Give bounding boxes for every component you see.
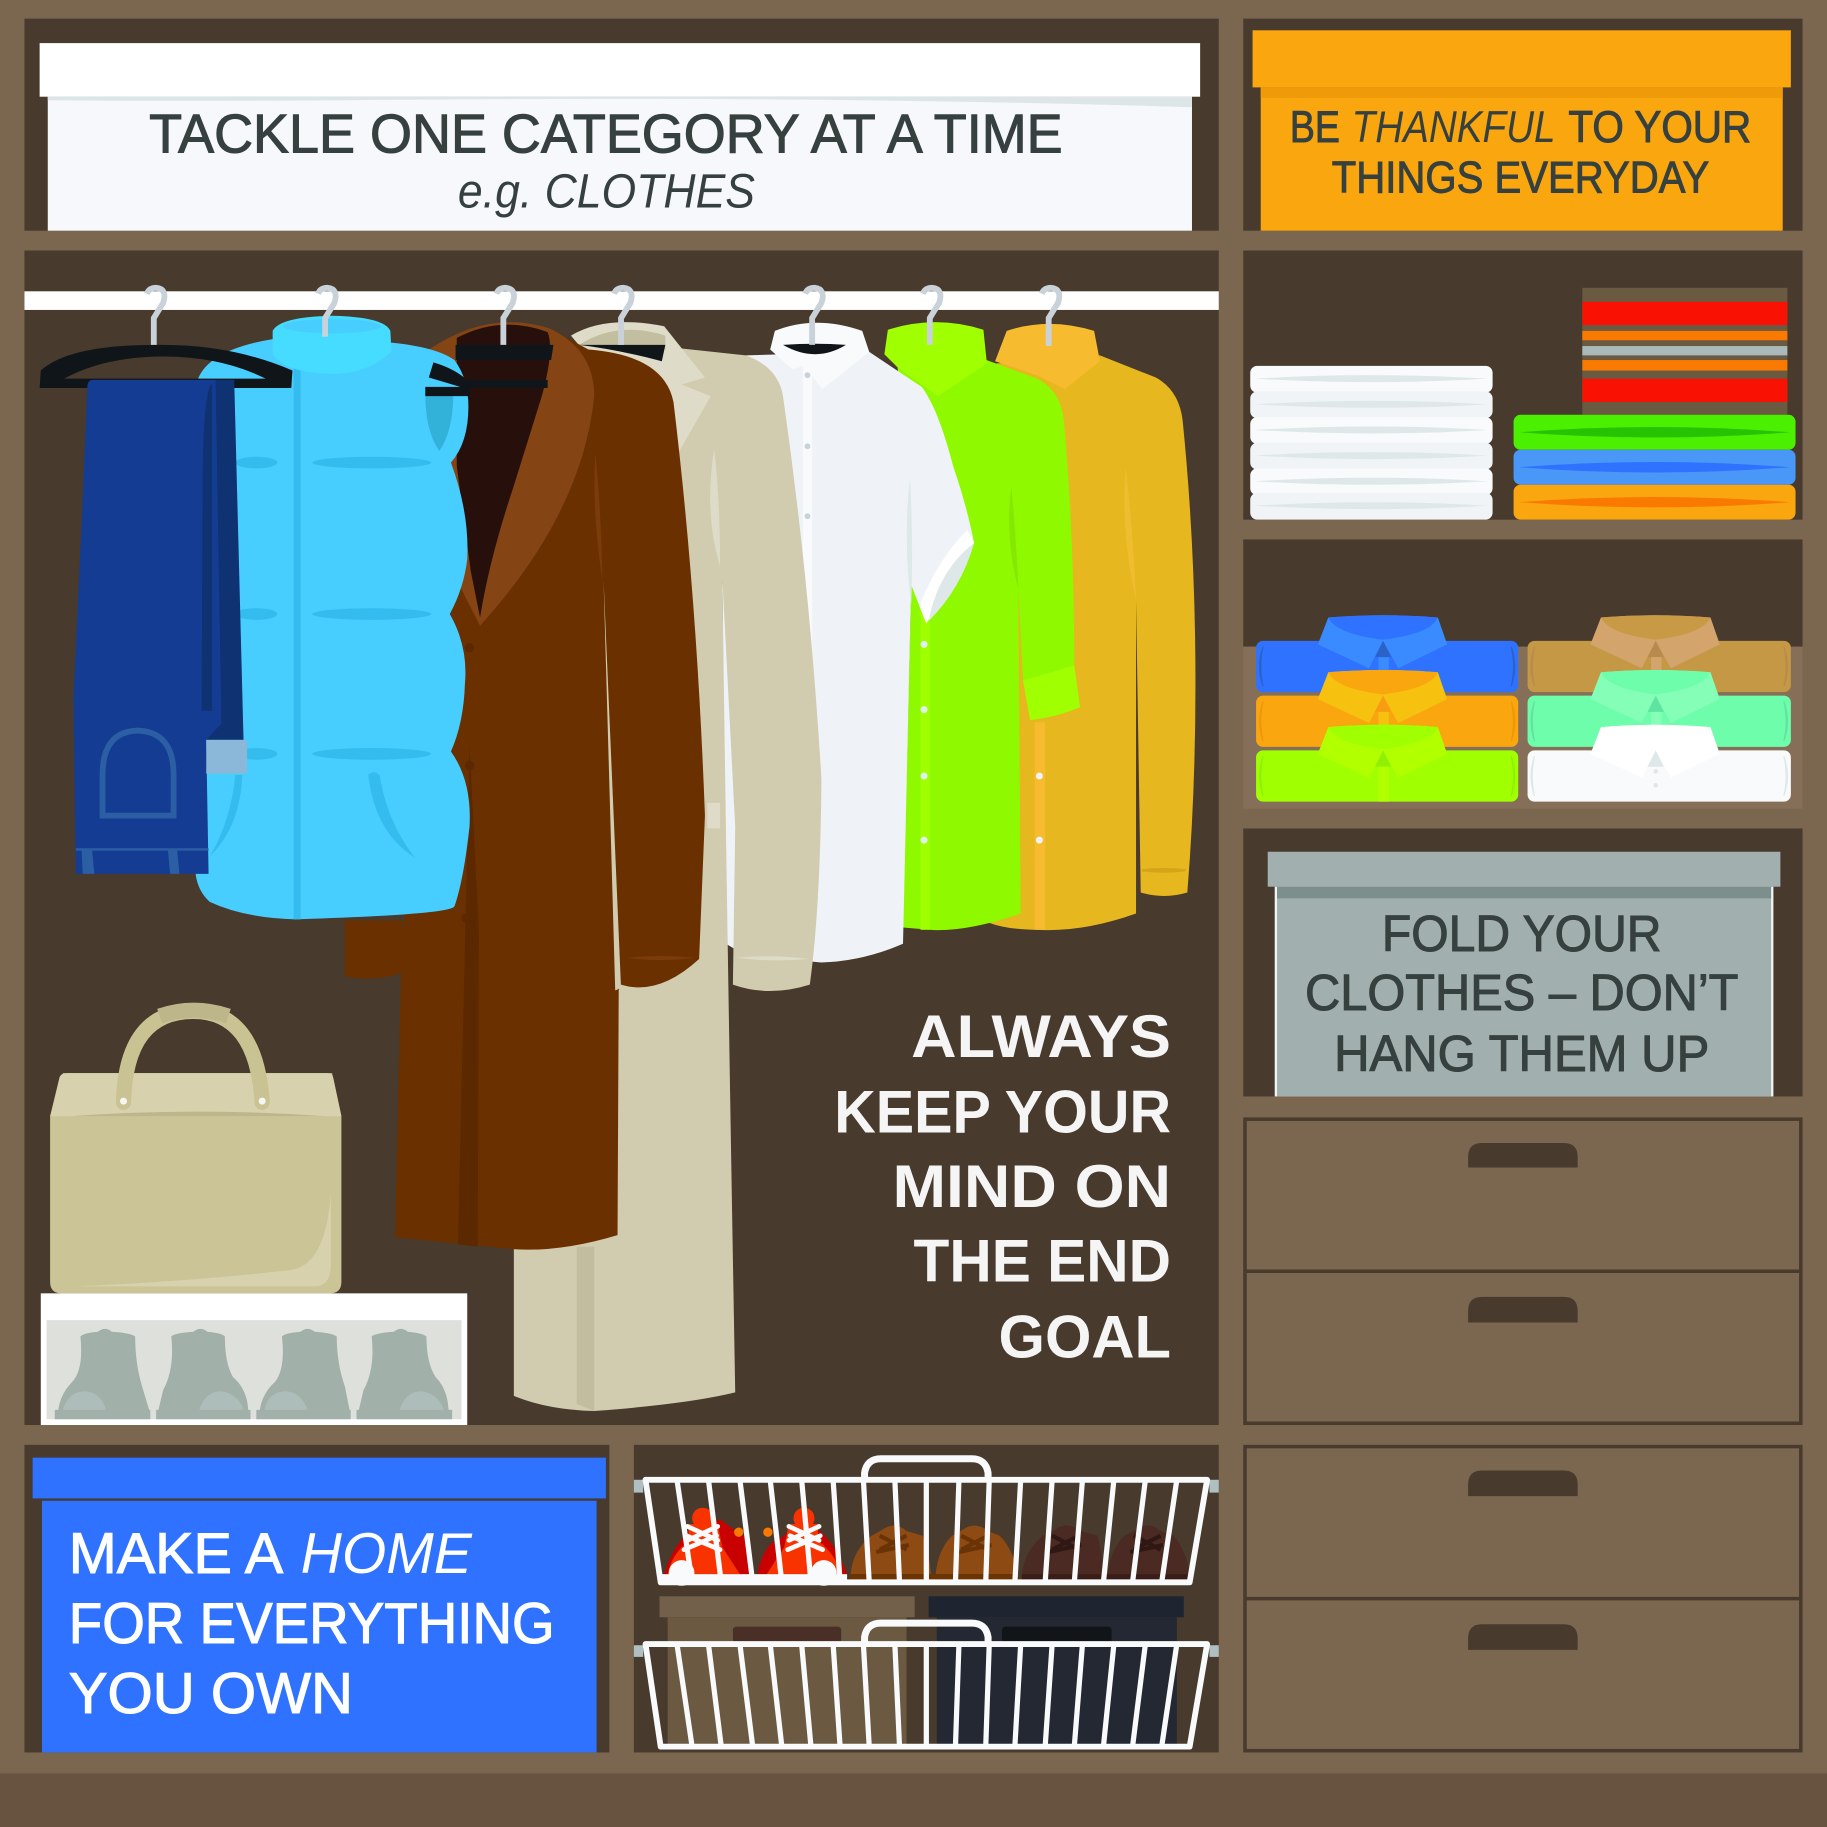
lime folded shirt bbox=[1256, 725, 1518, 802]
tan folded shirt bbox=[1528, 615, 1791, 692]
lower wire basket bbox=[634, 1623, 1219, 1747]
white shirt bbox=[722, 323, 974, 962]
text: fold your clothes bbox=[1305, 905, 1738, 1082]
text: e.g. clothes: e.g. CLOTHES bbox=[458, 165, 755, 218]
red sneakers bbox=[661, 1508, 847, 1586]
text: always keep your mind on the end goal: KEEP YOUR bbox=[834, 1078, 1171, 1146]
brown coat bbox=[345, 322, 705, 1250]
lower drawers bbox=[1244, 1447, 1801, 1751]
shoes in basket bbox=[661, 1508, 1190, 1586]
text: always keep your mind on the end goal bbox=[834, 1002, 1171, 1370]
striped folded blanket bbox=[1582, 288, 1787, 415]
text: make a home for everything you own bbox=[69, 1522, 555, 1726]
text: always keep your mind on the end goal: ALWAYS bbox=[911, 1002, 1171, 1070]
text: make a home for everything you own: HOME bbox=[301, 1522, 473, 1586]
text: be thankful to your things everyday: THANKFUL bbox=[1352, 103, 1556, 152]
box: tackle one category bbox=[40, 43, 1200, 231]
text: be thankful to your things everyday: THINGS EVERYDAY bbox=[1332, 153, 1709, 202]
box: be thankful bbox=[1253, 30, 1791, 231]
upper drawers bbox=[1244, 1119, 1801, 1423]
box: fold your clothes bbox=[1268, 852, 1780, 1096]
text: fold your clothes: CLOTHES – DON’T bbox=[1305, 964, 1738, 1021]
clothes rail bbox=[24, 291, 1219, 310]
upper wire basket bbox=[634, 1459, 1219, 1582]
text: be thankful to your things everyday: TO YOUR bbox=[1568, 103, 1751, 152]
hanger hooks bbox=[147, 288, 1059, 346]
orange folded shirt bbox=[1256, 670, 1518, 747]
blue jeans on hanger bbox=[40, 345, 292, 874]
text: fold your clothes: HANG THEM UP bbox=[1334, 1025, 1709, 1082]
mint folded shirt bbox=[1528, 670, 1791, 747]
blue puffer vest bbox=[196, 316, 471, 919]
text: always keep your mind on the end goal: THE END bbox=[914, 1227, 1171, 1295]
brown shoes bbox=[849, 1525, 1018, 1580]
green shirt bbox=[884, 322, 1080, 930]
text: make a home for everything you own: MAKE A bbox=[69, 1522, 283, 1586]
beige handbag bbox=[50, 1010, 341, 1293]
folded shirts left pile bbox=[1256, 615, 1518, 802]
text: make a home for everything you own: YOU OWN bbox=[69, 1662, 353, 1726]
yellow shirt bbox=[989, 324, 1195, 930]
boots bbox=[55, 1329, 452, 1419]
dark shoes bbox=[1022, 1525, 1190, 1580]
text: always keep your mind on the end goal: GOAL bbox=[999, 1302, 1171, 1370]
text: be thankful to your things everyday bbox=[1290, 103, 1751, 202]
box: make a home bbox=[33, 1458, 606, 1752]
blue folded shirt bbox=[1256, 615, 1518, 692]
text: be thankful to your things everyday: BE bbox=[1290, 103, 1340, 152]
text: fold your clothes: FOLD YOUR bbox=[1382, 905, 1662, 962]
shoe box with boots bbox=[41, 1293, 467, 1425]
text: always keep your mind on the end goal: MIND ON bbox=[893, 1152, 1171, 1220]
hanging clothes bbox=[40, 288, 1195, 1411]
storage boxes bbox=[659, 1596, 1184, 1745]
folded white t-shirts stack bbox=[1250, 366, 1493, 520]
coloured folded clothes stack bbox=[1514, 415, 1796, 520]
white folded shirt bbox=[1528, 725, 1791, 802]
folded shirts right pile bbox=[1528, 615, 1791, 802]
beige coat bbox=[514, 322, 821, 1411]
heading: tackle one category: TACKLE ONE CATEGORY AT A TIME bbox=[149, 103, 1063, 165]
text: make a home for everything you own: FOR EVERYTHING bbox=[69, 1592, 555, 1656]
